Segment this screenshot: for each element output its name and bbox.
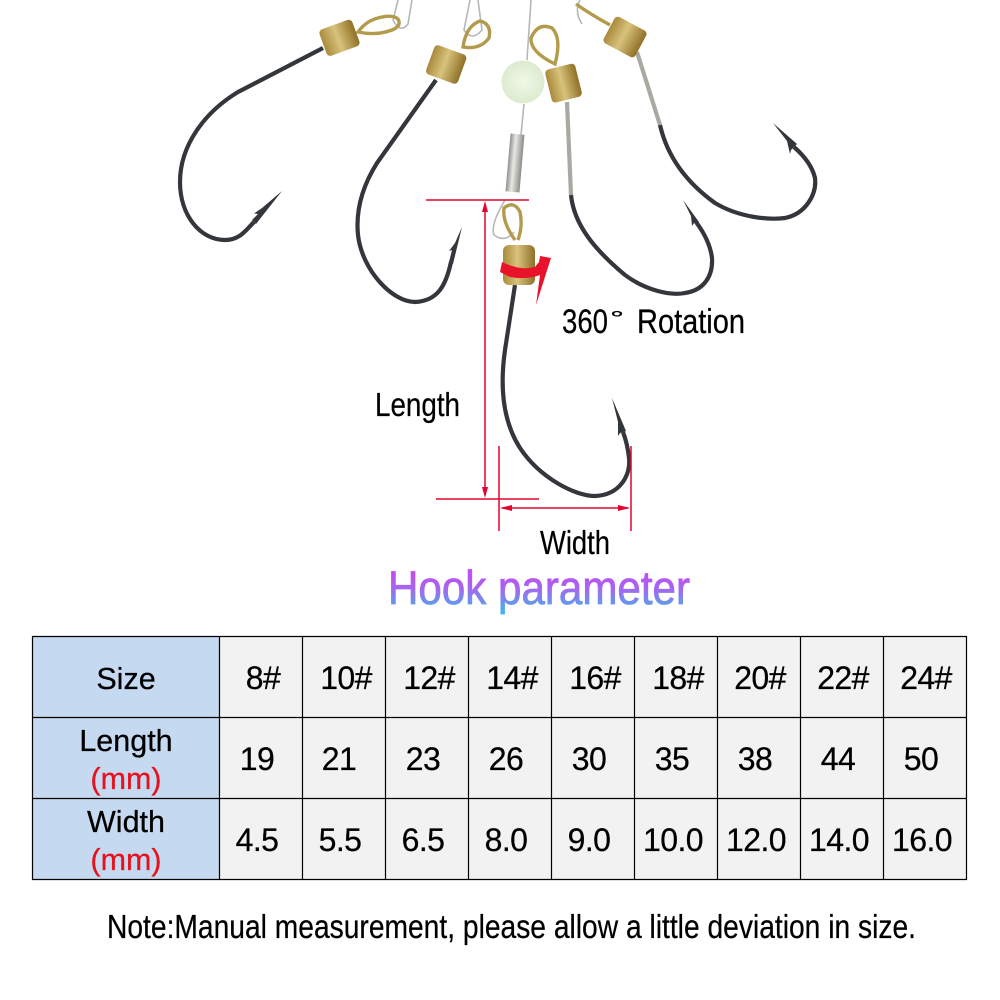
dimension lines: length — [426, 200, 539, 499]
row: size: 22# — [817, 660, 870, 696]
row: size: 10# — [320, 660, 373, 696]
hook 2 — [358, 0, 490, 302]
label: width: Width — [540, 524, 610, 561]
row: width: 9.0 — [568, 822, 610, 858]
row: size: 18# — [652, 660, 705, 696]
hook 4 — [576, 0, 815, 219]
main measured hook — [493, 200, 629, 496]
row: size: 16# — [569, 660, 622, 696]
parameter table — [32, 636, 966, 880]
label: length: Length — [375, 386, 460, 423]
row: size: 14# — [486, 660, 539, 696]
row: width: Width — [87, 805, 165, 839]
glow bead — [502, 60, 544, 104]
row: length: 35 — [655, 741, 689, 777]
row: width: 5.5 — [319, 822, 361, 858]
row: length: 44 — [821, 741, 855, 777]
dimension lines: width — [499, 446, 631, 531]
label: 360 rotation: 360 — [562, 303, 608, 341]
row: length: (mm) — [90, 762, 162, 796]
row: size: 20# — [734, 660, 787, 696]
row: size: 8# — [246, 660, 281, 696]
label: 360 rotation: Rotation — [637, 303, 745, 341]
title: Hook parameter — [388, 561, 690, 614]
row: length: 50 — [904, 741, 938, 777]
row: size: 12# — [403, 660, 456, 696]
row: width: 12.0 — [726, 822, 786, 858]
row: size: Size — [96, 662, 156, 696]
row: width: 10.0 — [643, 822, 703, 858]
row: width: 16.0 — [892, 822, 952, 858]
row: length: 38 — [738, 741, 772, 777]
row: length — [79, 724, 938, 796]
row: width: 6.5 — [402, 822, 444, 858]
hook 3 with glow bead — [502, 0, 712, 294]
label: 360 rotation — [562, 303, 745, 341]
row: width: (mm) — [90, 843, 162, 877]
hook 1 — [180, 0, 412, 240]
row: length: 30 — [572, 741, 606, 777]
row: length: 19 — [240, 741, 274, 777]
row: width: 14.0 — [809, 822, 869, 858]
icon: red rotation arrow — [500, 256, 551, 305]
row: length: Length — [79, 724, 173, 758]
row: length: 26 — [489, 741, 523, 777]
label: 360 rotation: ° — [610, 308, 624, 330]
row: size: 24# — [900, 660, 953, 696]
row: width: 8.0 — [485, 822, 527, 858]
crimp sleeve — [505, 134, 525, 192]
row: size — [96, 660, 953, 696]
row: length: 21 — [322, 741, 356, 777]
row: width — [87, 805, 952, 877]
row: width: 4.5 — [236, 822, 278, 858]
row: length: 23 — [406, 741, 440, 777]
